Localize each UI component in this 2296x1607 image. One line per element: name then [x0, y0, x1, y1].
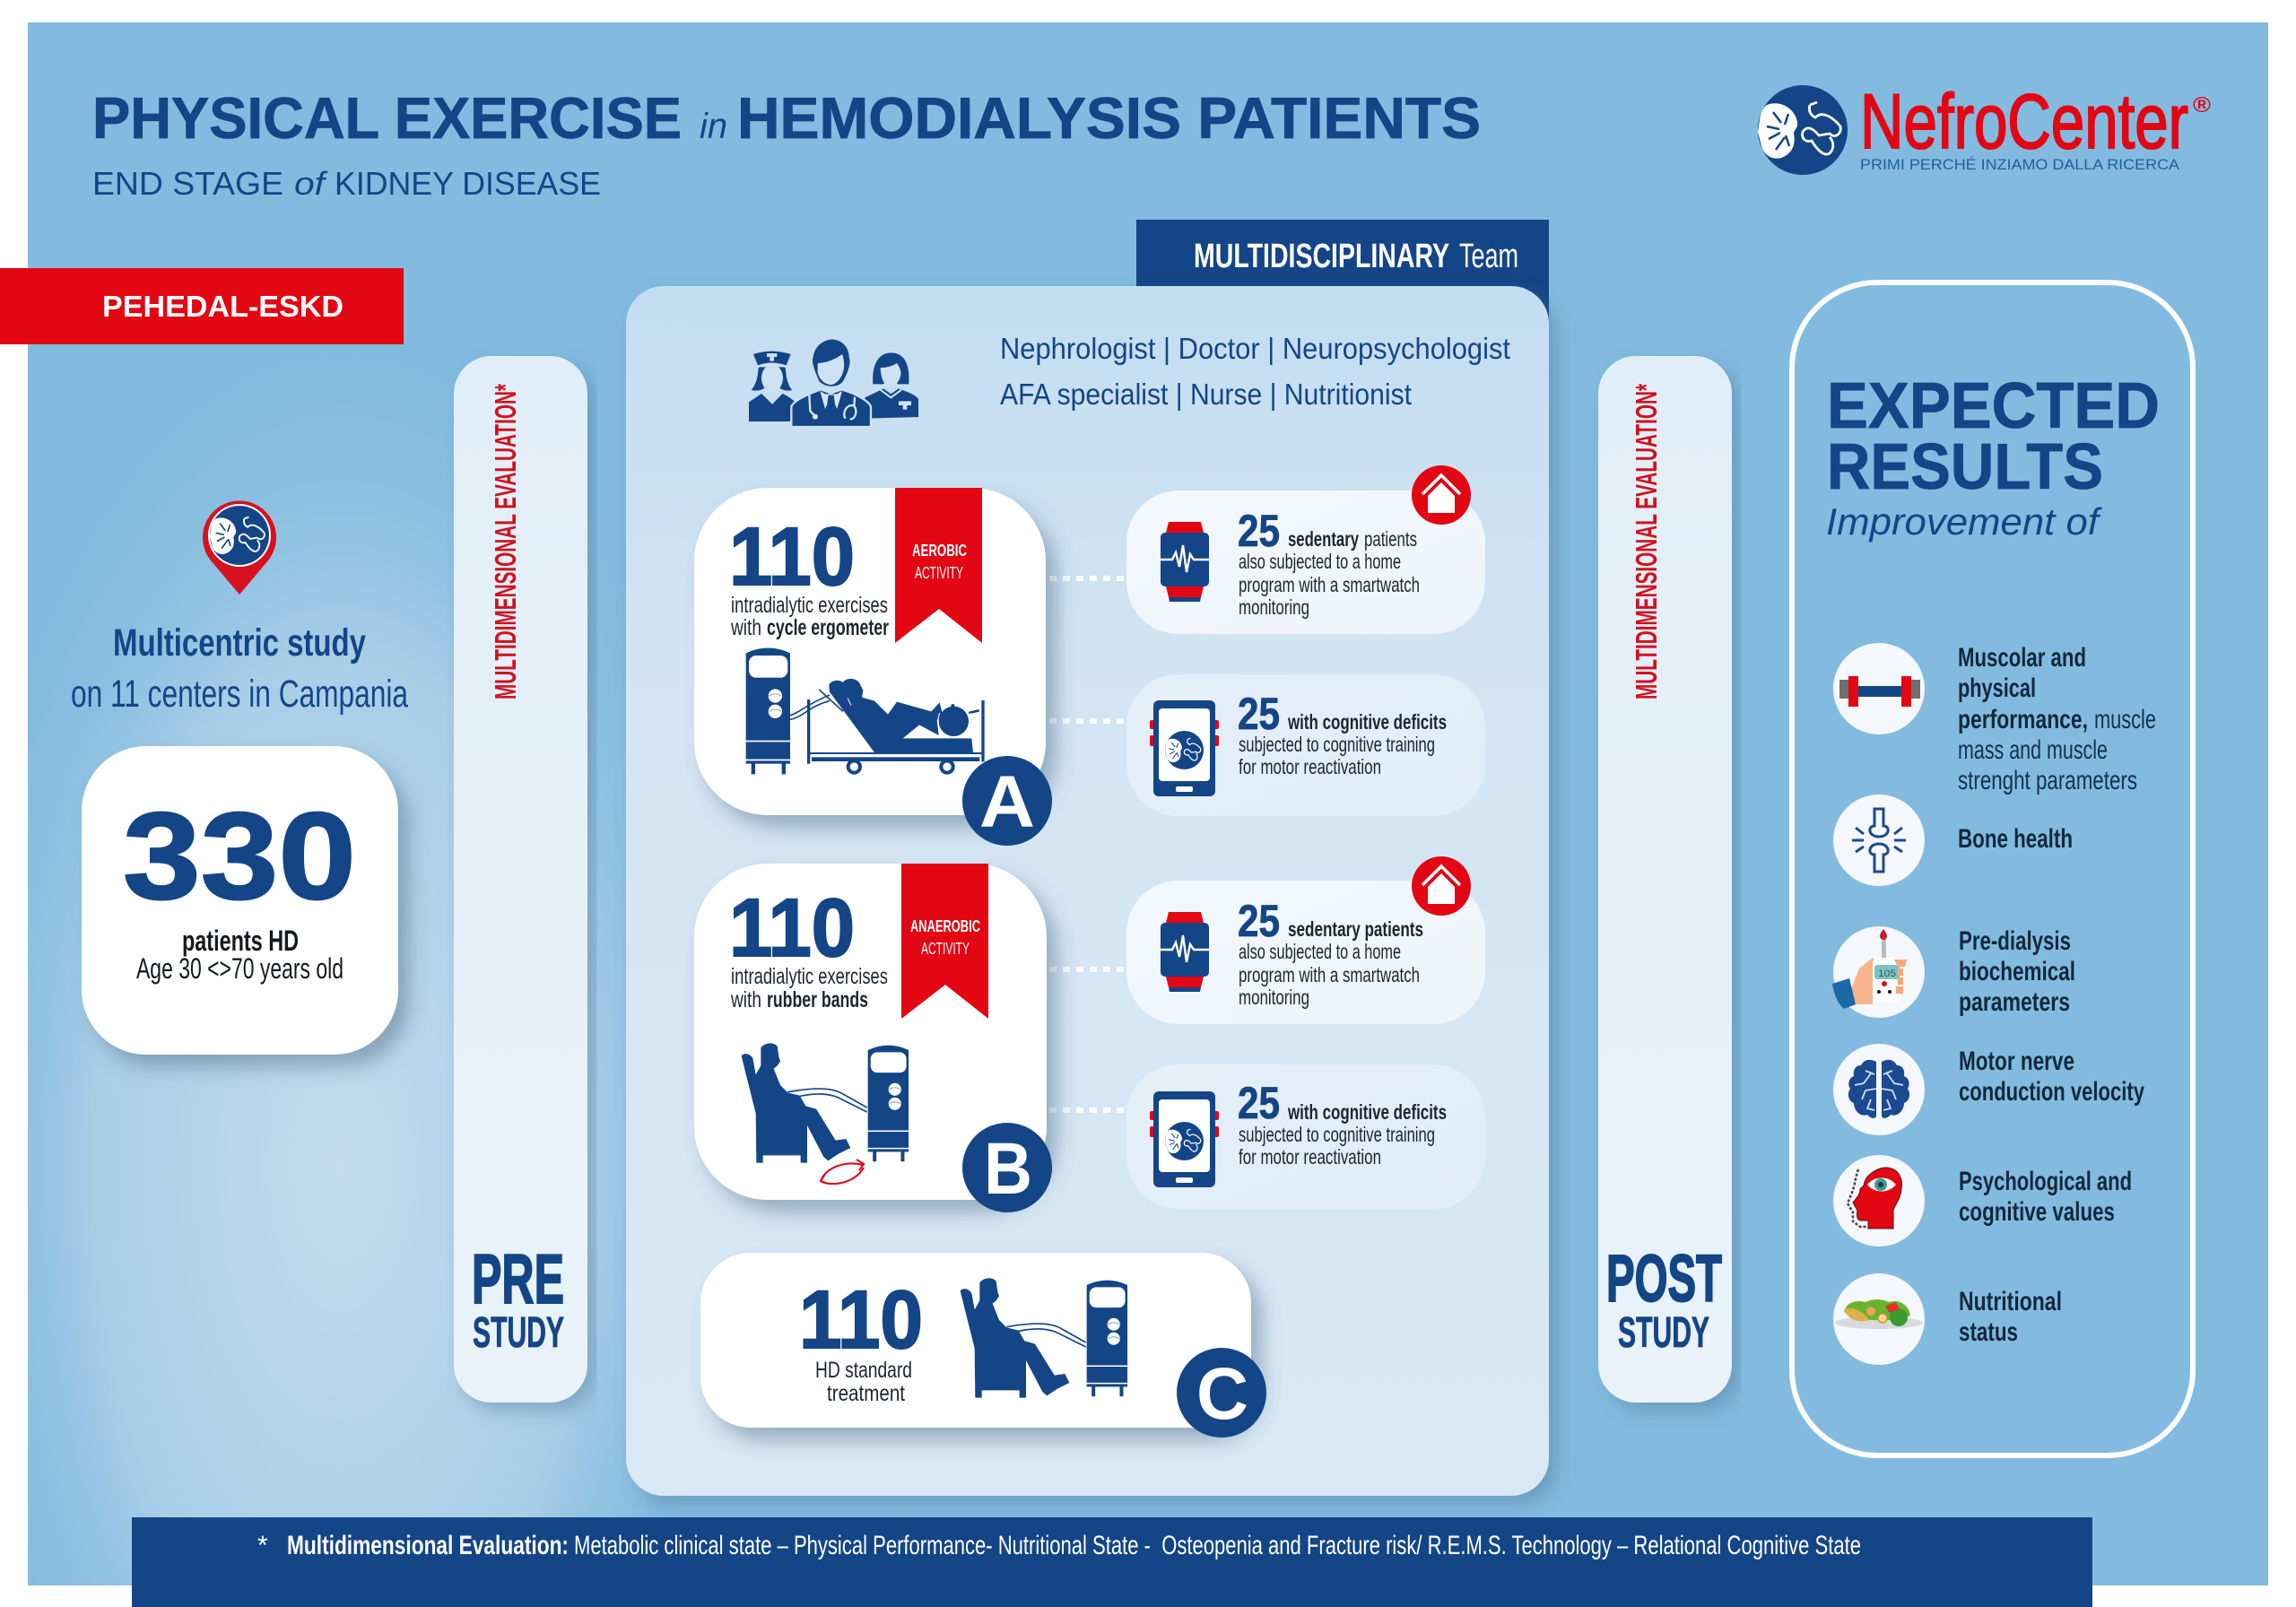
card B: anaerobic activity: intradialytic exercises: [731, 964, 888, 989]
subcard A1: sedentary home program: monitoring: [1239, 595, 1309, 619]
badge B: [962, 1123, 1052, 1212]
team list: AFA specialist | Nurse | Nutritionist: [1000, 378, 1412, 411]
subtitle: of: [294, 165, 329, 202]
card B: anaerobic activity: rubber bands: [767, 987, 868, 1012]
location pin: [203, 500, 276, 595]
bar: post study: [1598, 356, 1732, 1403]
subcard A2: cognitive deficits: with cognitive deficits: [1287, 710, 1447, 734]
icon: medical team: [749, 339, 918, 427]
result: biochemical: [1959, 926, 2075, 1017]
tab: multidisciplinary team: Team: [1459, 238, 1518, 275]
subcard A1: sedentary home program: sedentary: [1288, 527, 1359, 551]
logo: NefroCenter: ®: [2193, 93, 2211, 117]
subtitle: END STAGE: [92, 165, 283, 202]
result: motor nerve: [1959, 1047, 2144, 1107]
result: muscular performance: [1958, 643, 2156, 795]
result: muscular performance: muscle: [2094, 705, 2156, 734]
subcard A1: sedentary home program: [1126, 465, 1485, 634]
result: nutritional: [1959, 1287, 2062, 1347]
card B: anaerobic activity: with: [730, 987, 761, 1012]
subcard A1: sedentary home program: also subjected to a home: [1239, 550, 1401, 573]
result: muscular performance: Muscolar and: [1958, 643, 2086, 673]
connectors: [1049, 578, 1126, 1110]
logo: NefroCenter: PRIMI PERCHÉ INZIAMO DALLA RICERCA: [1860, 156, 2180, 173]
card: 330 patients: 330: [123, 787, 356, 925]
result: biochemical: Pre-dialysis: [1959, 926, 2071, 956]
result: muscular performance: physical: [1958, 673, 2036, 703]
result: bone health: Bone health: [1958, 824, 2073, 854]
subtitle: [92, 165, 601, 202]
footer bar: Multidimensional Evaluation:: [287, 1531, 569, 1560]
icon: patient in chair with dialysis machine: [742, 1043, 909, 1163]
card C: standard treatment: 110: [799, 1274, 923, 1366]
result: muscular performance: strenght parameters: [1958, 766, 2137, 795]
team list: [1000, 332, 1510, 411]
ribbon: anaerobic: [901, 864, 988, 1019]
bar: post study: MULTIDIMENSIONAL EVALUATION*: [1630, 384, 1663, 699]
heading: expected results: RESULTS: [1827, 431, 2103, 503]
badge C: C: [1196, 1353, 1248, 1435]
footer bar: [132, 1517, 2092, 1607]
card B: anaerobic activity: 110: [729, 882, 855, 974]
badge B: B: [984, 1128, 1032, 1210]
result: nutritional: status: [1959, 1317, 2018, 1347]
heading: expected results: [1826, 370, 2160, 543]
card A: aerobic activity: [694, 488, 1052, 846]
badge A: A: [979, 761, 1035, 843]
card A: aerobic activity: cycle ergometer: [767, 615, 889, 640]
subtitle: KIDNEY DISEASE: [335, 165, 601, 202]
result: motor nerve: Motor nerve: [1959, 1047, 2074, 1076]
card A: aerobic activity: with: [730, 615, 761, 640]
subcard B1: sedentary home program: also subjected to a home: [1239, 940, 1401, 963]
title: [92, 85, 1481, 151]
bar: pre study: [454, 356, 587, 1403]
result: muscular performance: mass and muscle: [1958, 735, 2108, 765]
ribbon: aerobic: [895, 488, 982, 643]
subcard B1: sedentary home program: [1126, 856, 1485, 1024]
badge C: [1177, 1348, 1266, 1438]
card: 330 patients: [82, 746, 398, 1055]
subcard B1: sedentary home program: 25: [1238, 896, 1280, 946]
subcard A2: cognitive deficits: for motor reactivation: [1239, 755, 1381, 778]
subcard B1: sedentary home program: monitoring: [1239, 986, 1309, 1009]
subcard A2: cognitive deficits: subjected to cognitive training: [1239, 733, 1435, 756]
card C: standard treatment: treatment: [827, 1381, 905, 1406]
red study banner: PEHEDAL-ESKD: [102, 290, 344, 323]
ribbon: anaerobic: ANAEROBIC: [910, 917, 980, 935]
red study banner: [0, 268, 404, 344]
subcard B2: cognitive deficits: subjected to cognitive training: [1239, 1123, 1435, 1146]
heading: expected results: EXPECTED: [1827, 370, 2160, 442]
heading: expected results: Improvement of: [1826, 500, 2102, 543]
subcard B1: sedentary home program: sedentary patients: [1288, 917, 1423, 941]
footer bar: Metabolic clinical state – Physical Performance- Nutritional State - Osteopenia and Fracture risk/ R.E.M.S. Technology – Relational Cognitive State: [574, 1531, 1861, 1560]
title: in: [700, 107, 727, 146]
icon: bone joint: [1833, 795, 1925, 886]
icon: salad plate: [1833, 1273, 1925, 1365]
team list: Nephrologist | Doctor | Neuropsychologist: [1000, 332, 1510, 365]
result: biochemical: biochemical: [1959, 957, 2075, 986]
subcard A1: sedentary home program: patients: [1364, 527, 1417, 551]
result: psychological: [1959, 1167, 2132, 1227]
multicentric study text: Multicentric study: [113, 621, 366, 665]
subcard A1: sedentary home program: 25: [1238, 506, 1280, 556]
bar: post study: POST: [1606, 1241, 1722, 1316]
result: motor nerve: conduction velocity: [1959, 1077, 2144, 1107]
subcard A1: sedentary home program: program with a smartwatch: [1239, 573, 1420, 596]
logo: NefroCenter: NefroCenter: [1860, 79, 2188, 165]
result: psychological: Psychological and: [1959, 1167, 2132, 1196]
icon: glucose meter: [1832, 926, 1925, 1018]
ribbon: aerobic: ACTIVITY: [915, 564, 963, 582]
multicentric study text: on 11 centers in Campania: [71, 673, 408, 716]
result: psychological: cognitive values: [1959, 1197, 2115, 1227]
card: 330 patients: Age 30 <>70 years old: [136, 952, 344, 985]
tab: multidisciplinary team: [1136, 220, 1549, 336]
icon: brain: [1833, 1044, 1925, 1135]
icon: glucose meter: 105: [1878, 969, 1896, 979]
bar: post study: STUDY: [1618, 1309, 1709, 1357]
subcard B2: cognitive deficits: for motor reactivation: [1239, 1145, 1381, 1168]
card: 330 patients: patients HD: [182, 925, 299, 957]
footer bar: *: [257, 1531, 268, 1560]
subcard A2: cognitive deficits: [1126, 674, 1485, 816]
icon: dumbbell: [1833, 643, 1925, 734]
card B: anaerobic activity: [694, 864, 1052, 1212]
ribbon: aerobic: AEROBIC: [912, 542, 967, 560]
icon: red rubber band arrows: [821, 1160, 864, 1184]
icon: dialysis machine and patient on bed with cycle: [746, 647, 985, 774]
badge A: [962, 756, 1052, 846]
title: HEMODIALYSIS PATIENTS: [737, 85, 1481, 151]
bar: pre study: PRE: [472, 1239, 564, 1318]
bar: pre study: STUDY: [473, 1309, 564, 1357]
multicentric study text: [71, 621, 408, 716]
subcard B2: cognitive deficits: with cognitive deficits: [1287, 1100, 1447, 1124]
panel: protocol arms: [626, 286, 1549, 1496]
panel: expected results: [1792, 282, 2193, 1455]
tab: multidisciplinary team: MULTIDISCIPLINARY: [1194, 238, 1449, 275]
result: biochemical: parameters: [1959, 987, 2070, 1017]
card C: standard treatment: HD standard: [815, 1358, 912, 1383]
icon: head with eye: [1833, 1155, 1925, 1247]
subcard B2: cognitive deficits: [1126, 1064, 1485, 1209]
ribbon: anaerobic: ACTIVITY: [921, 940, 970, 958]
subcard B2: cognitive deficits: 25: [1238, 1078, 1280, 1128]
result: nutritional: Nutritional: [1959, 1287, 2062, 1316]
result: muscular performance: performance,: [1958, 705, 2088, 734]
subcard B1: sedentary home program: program with a smartwatch: [1239, 963, 1420, 986]
logo: NefroCenter: [1758, 79, 2211, 175]
card A: aerobic activity: intradialytic exercises: [731, 593, 888, 618]
bar: pre study: MULTIDIMENSIONAL EVALUATION*: [489, 384, 522, 699]
card A: aerobic activity: 110: [729, 511, 855, 603]
title: PHYSICAL EXERCISE: [92, 85, 682, 151]
card C: standard treatment: [700, 1253, 1266, 1438]
subcard A2: cognitive deficits: 25: [1238, 689, 1280, 739]
